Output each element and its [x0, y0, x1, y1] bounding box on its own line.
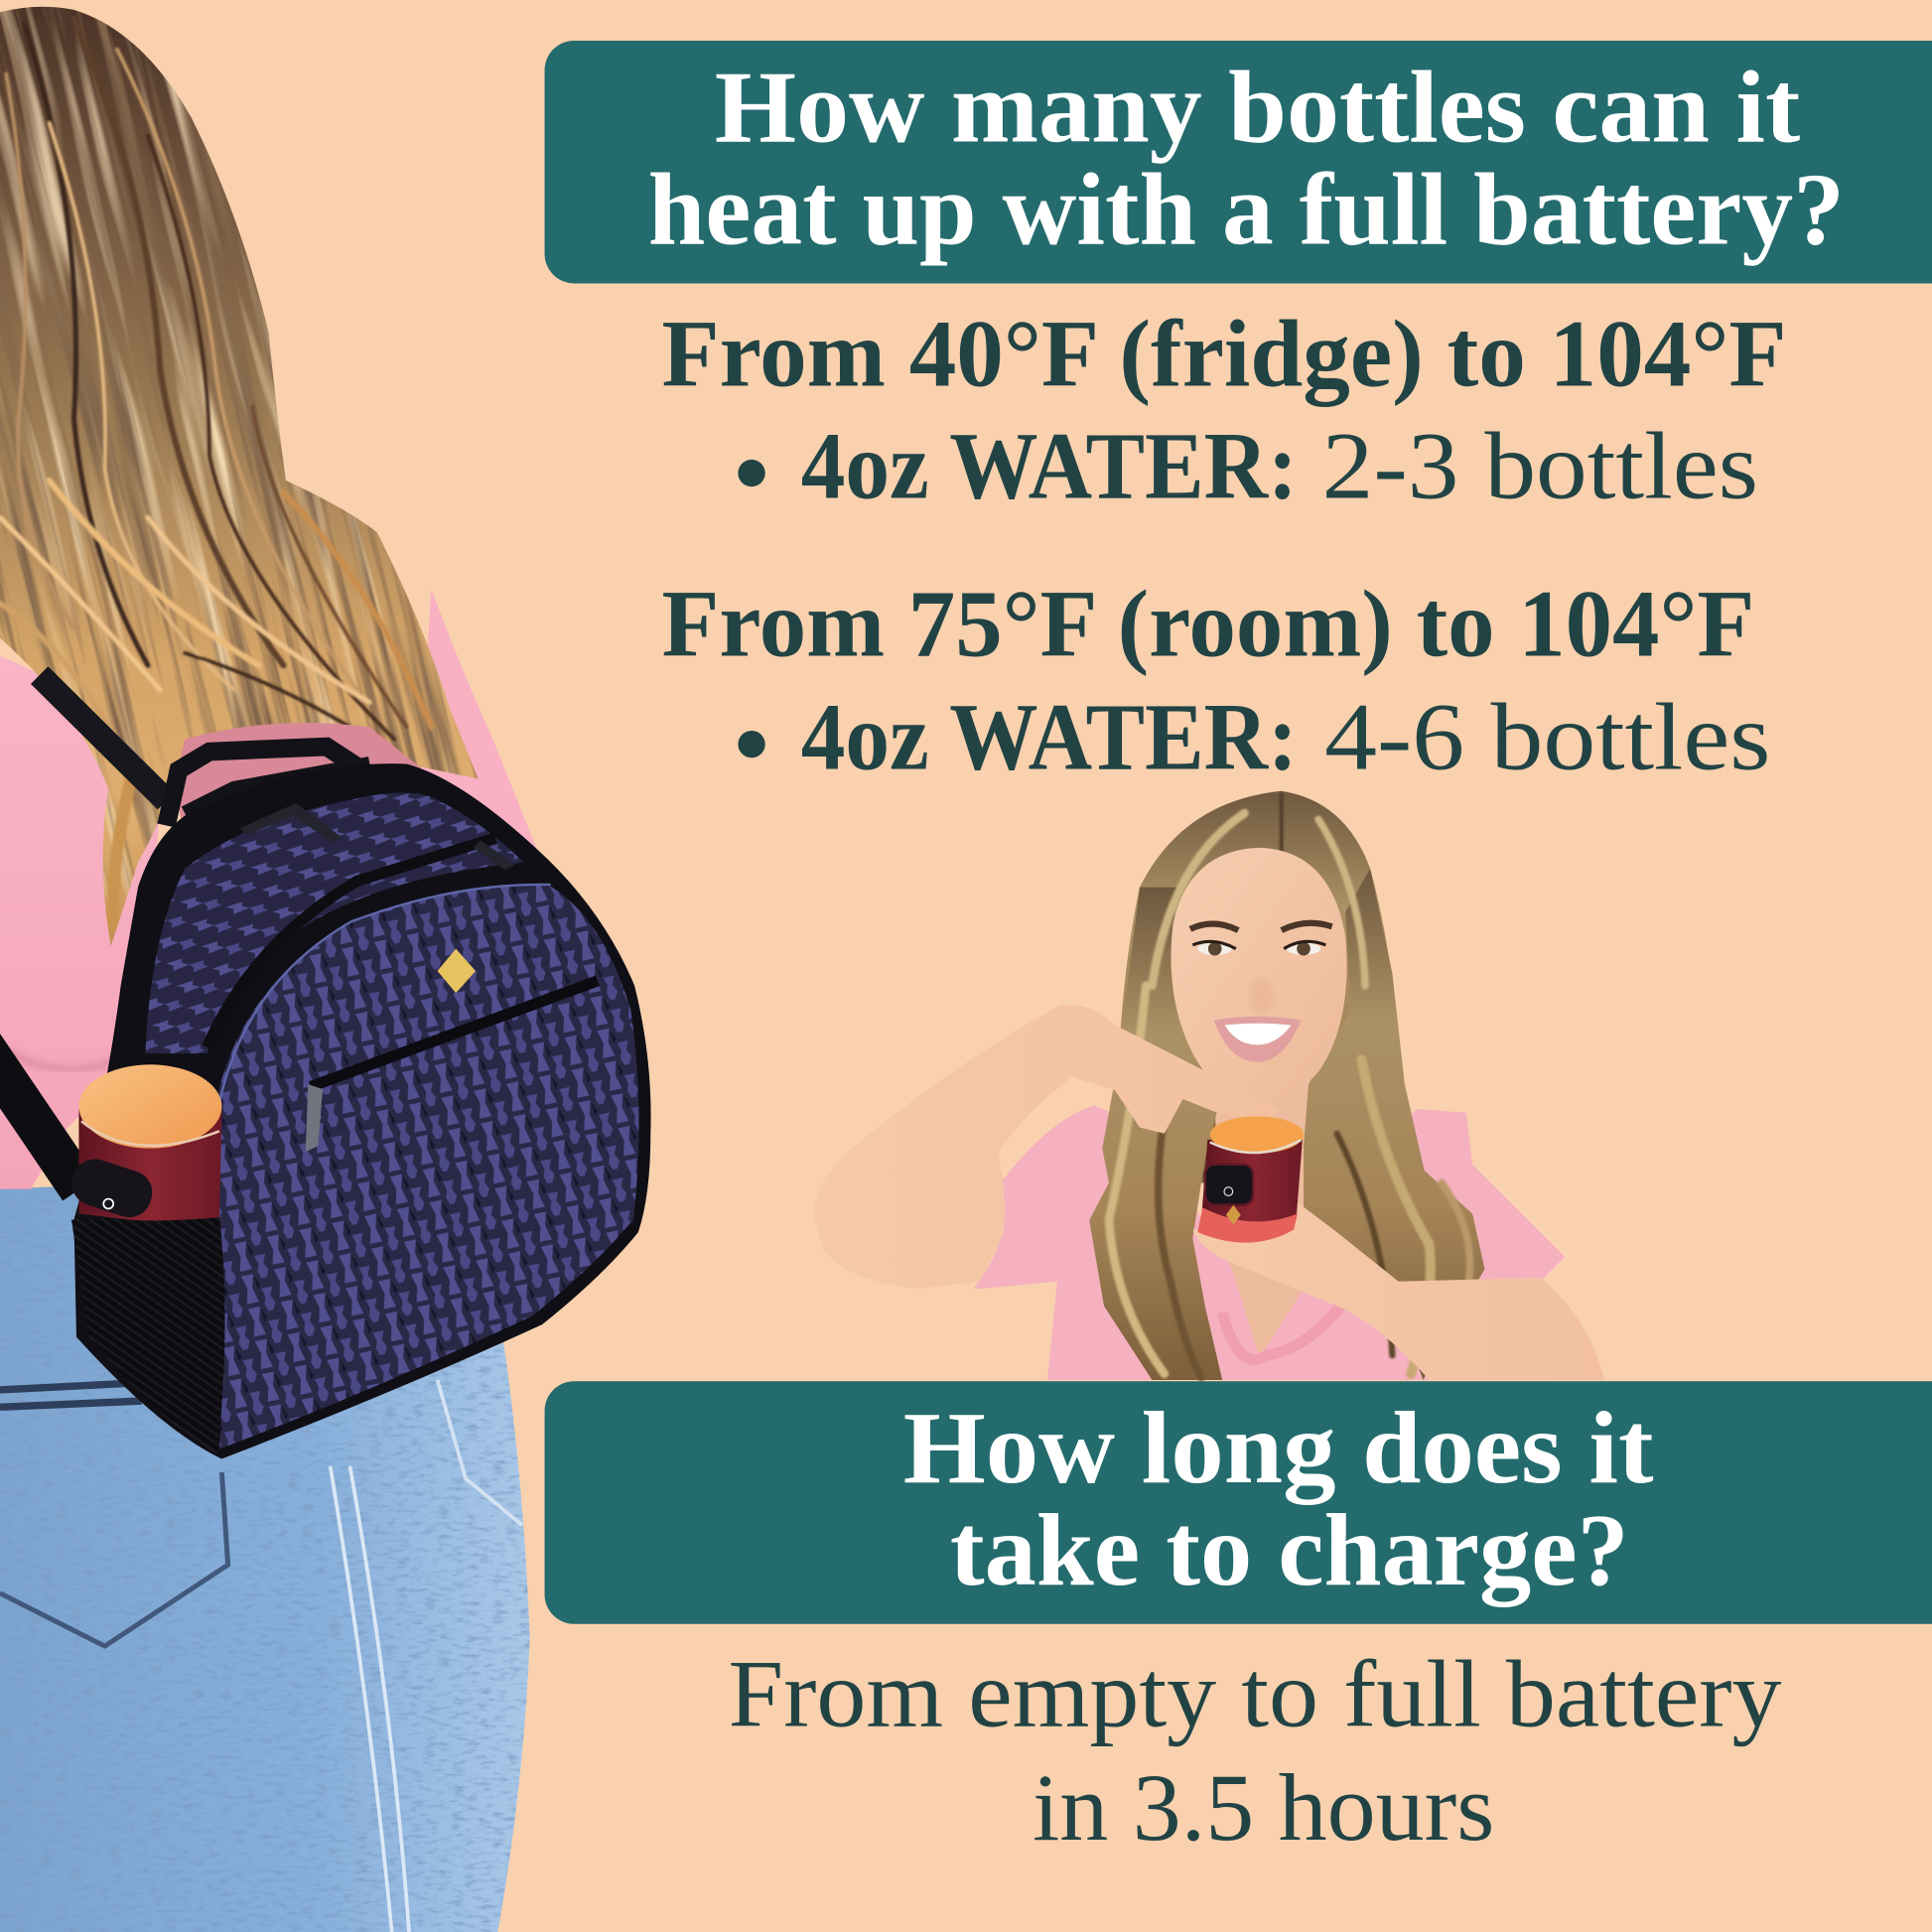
right lock of hair: [1304, 869, 1484, 1380]
mesh side pocket: [71, 1213, 225, 1453]
pink shirt: [0, 589, 537, 1189]
charge time answer: in 3.5 hours: [1033, 1754, 1494, 1861]
room temperature block: 4-6 bottles: [1324, 683, 1770, 789]
raised arm and hand: [813, 1005, 1278, 1289]
jeans: [0, 1182, 530, 1932]
room temperature block: 4oz WATER:: [801, 683, 1298, 789]
bottle control panel: [67, 1154, 158, 1223]
charge time answer: From empty to full battery: [728, 1641, 1782, 1747]
room temperature block: [661, 570, 1770, 789]
heading banner: charge time: take to charge?: [950, 1492, 1629, 1607]
top zipper pulls: [240, 803, 515, 870]
backpack body: [73, 763, 651, 1458]
fridge temperature block: From 40°F (fridge) to 104°F: [661, 300, 1787, 406]
gold logo badge: [438, 949, 476, 993]
backpack straps: [0, 675, 376, 1189]
heading banner: how many bottles: heat up with a full battery?: [648, 152, 1845, 267]
heading banner: charge time: How long does it: [903, 1390, 1654, 1505]
long blonde hair: [0, 6, 479, 946]
lower arm and hand: [1192, 1201, 1604, 1380]
heading banner: charge time: [545, 1381, 1932, 1624]
smile: [1213, 1017, 1302, 1062]
neck: [1213, 1059, 1320, 1358]
fridge temperature block: 2-3 bottles: [1322, 412, 1758, 518]
bottle warmer in side pocket: [67, 1064, 221, 1223]
heading banner: how many bottles: [545, 41, 1932, 283]
shirt: [973, 1105, 1565, 1380]
room temperature block: From 75°F (room) to 104°F: [661, 570, 1754, 676]
fridge temperature block: 4oz WATER:: [801, 412, 1298, 518]
fridge temperature block: [661, 300, 1787, 518]
puffed sleeve: [980, 1106, 1109, 1289]
product logo: [1226, 1205, 1241, 1225]
front pocket zipper: [311, 981, 598, 1087]
photo: woman from behind wearing backpack: [0, 0, 673, 1932]
face: [1171, 848, 1347, 1103]
charge time answer: [728, 1641, 1782, 1861]
photo: smiling woman holding bottle warmer: [813, 791, 1604, 1380]
heading banner: how many bottles: How many bottles can it: [715, 50, 1800, 165]
zipper pull: [306, 1084, 323, 1152]
product display: [1205, 1165, 1253, 1205]
hair strands: [1109, 794, 1470, 1378]
bottle warmer product: [1197, 1116, 1304, 1243]
hair behind head: [1119, 791, 1399, 1182]
left lock of hair: [1089, 888, 1222, 1380]
